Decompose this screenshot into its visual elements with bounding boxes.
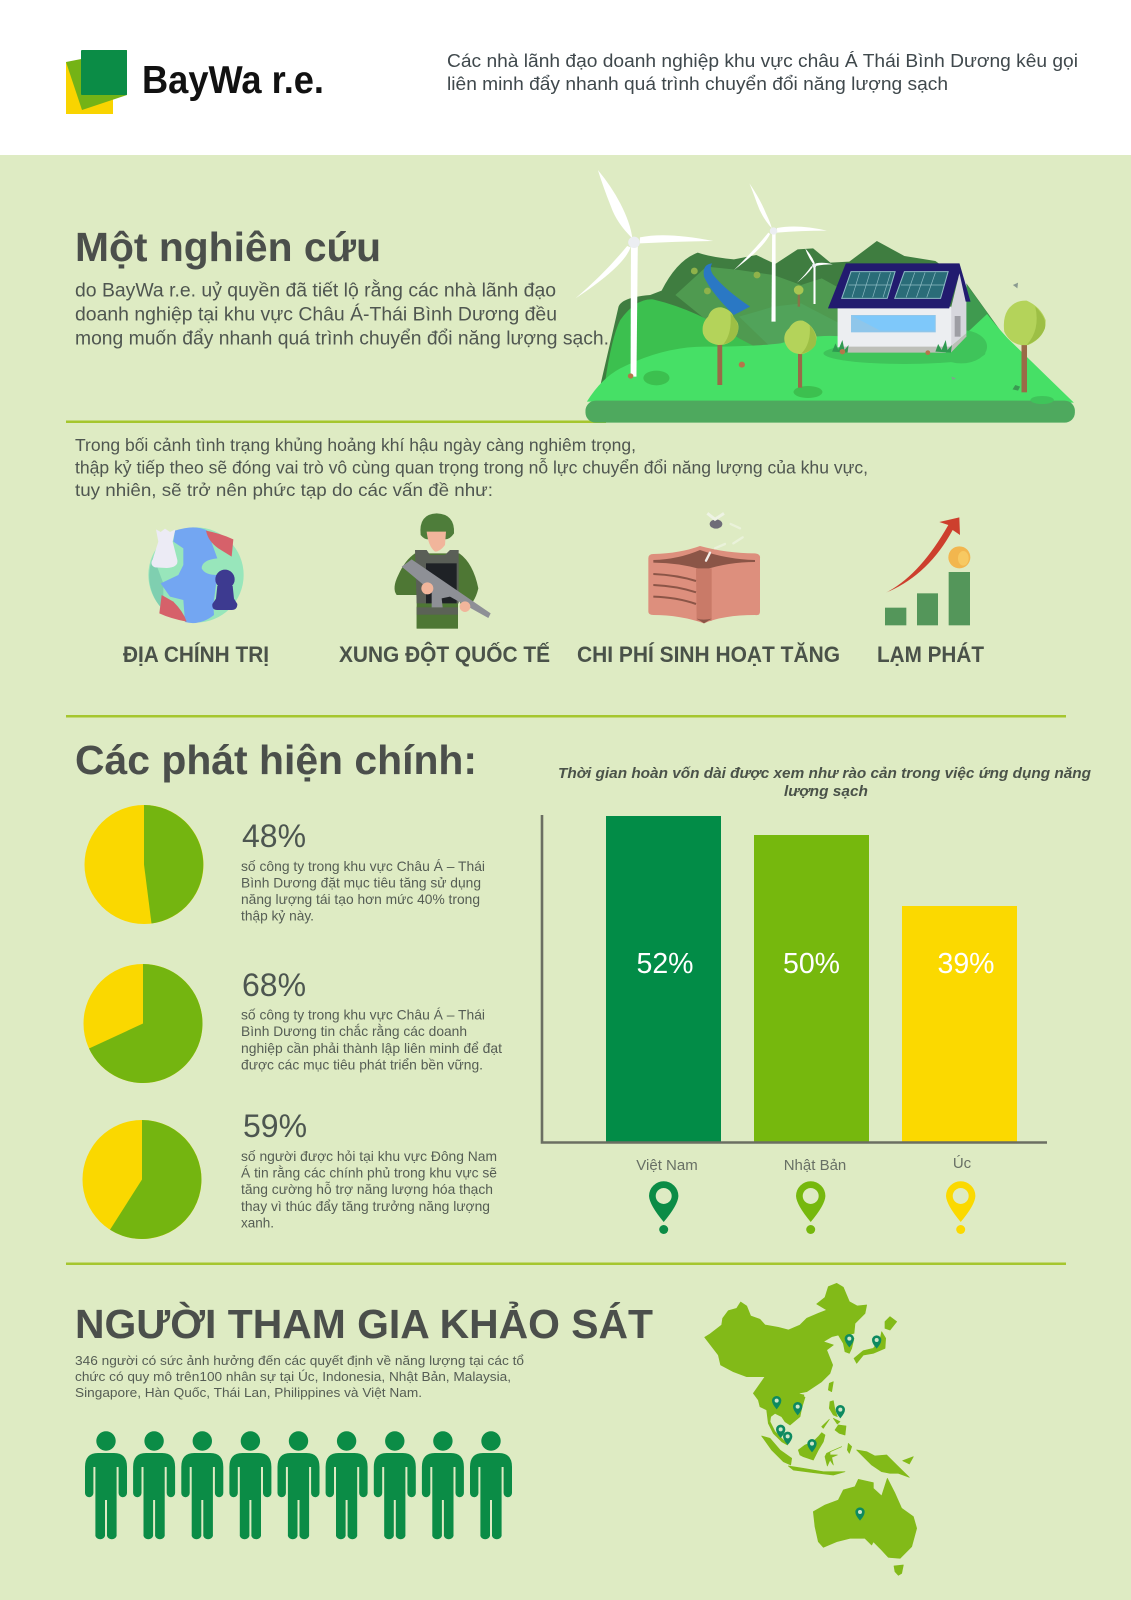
bar labels [636,1155,972,1174]
survey description: 346 người có sức ảnh hưởng đến các quyết định về năng lượng tại các tổ [75,1353,524,1368]
map: Asia-Pacific with survey locations [705,1283,917,1575]
people pictogram row [85,1431,512,1539]
divider [66,715,1066,718]
survey description: Singapore, Hàn Quốc, Thái Lan, Philippines và Việt Nam. [75,1385,422,1400]
finding 2: 68% [242,967,306,1003]
bar chart: 50% [783,948,840,980]
base [585,401,1075,423]
illustration: renewable energy landscape [575,170,1075,423]
pie chart 59% [82,1120,202,1239]
finding 3: xanh. [241,1214,274,1230]
finding 3: Á tin rằng các chính phủ trong khu vực sẽ [241,1164,497,1180]
bar chart: 52% [636,948,694,980]
context text: Trong bối cảnh tình trạng khủng hoảng khí hậu ngày càng nghiêm trọng, [75,435,636,455]
header statement: liên minh đẩy nhanh quá trình chuyển đổi năng lượng sạch [447,74,948,94]
finding 3: thay vì thúc đẩy tăng trưởng năng lượng [241,1198,490,1214]
icon: geopolitics globe [148,527,244,623]
icon: inflation chart [885,517,970,625]
chart title: Thời gian hoàn vốn dài được xem như rào cản trong việc ứng dụng năng [558,765,1091,782]
icon: location pin Nhật Bản [796,1181,825,1234]
labels: issues: XUNG ĐỘT QUỐC TẾ [339,641,550,667]
mound details [643,371,670,385]
heading: survey participants: NGƯỜI THAM GIA KHẢO SÁT [75,1301,653,1347]
heading: Một nghiên cứu: Một nghiên cứu [75,224,381,270]
survey description [75,1353,524,1400]
pie chart 68% [84,964,202,1083]
labels: issues: LẠM PHÁT [877,642,985,667]
bar labels: Việt Nam [636,1157,698,1174]
logo: BayWa r.e. [66,50,324,114]
finding 1: Bình Dương đặt mục tiêu tăng sử dụng [241,874,481,890]
context text [75,435,868,500]
labels: issues: ĐỊA CHÍNH TRỊ [123,642,269,667]
finding 1: thập kỷ này. [241,908,314,924]
chart title: lượng sạch [784,783,868,800]
Australia and Tasmania [813,1478,917,1575]
finding 3: tăng cường hỗ trợ năng lượng hóa thạch [241,1181,493,1197]
river [704,263,750,315]
finding 2: nghiệp cần phải thành lập liên minh để đạt [241,1040,502,1056]
chart title [558,765,1091,800]
finding 2: số công ty trong khu vực Châu Á – Thái [241,1006,485,1022]
intro text: doanh nghiệp tại khu vực Châu Á-Thái Bình Dương đều [75,304,557,326]
Southeast Asian islands and Papua [762,1401,913,1477]
bar chart: 39% [937,948,995,980]
finding 2: Bình Dương tin chắc rằng các doanh [241,1023,467,1039]
finding 2 [84,964,502,1083]
finding 1: 48% [242,818,306,854]
tree 2 [784,320,817,388]
intro text: mong muốn đẩy nhanh quá trình chuyển đổi năng lượng sạch. [75,328,609,350]
bar labels: Úc [953,1155,972,1172]
pie chart 48% [84,805,204,924]
survey description: chức có quy mô trên100 nhân sự tại Úc, Indonesia, Nhật Bản, Malaysia, [75,1369,511,1384]
bar chart [542,815,1047,1142]
small background tree [798,292,800,307]
intro text: do BayWa r.e. uỷ quyền đã tiết lộ rằng các nhà lãnh đạo [75,280,556,302]
finding 2: được các mục tiêu phát triển bền vững. [241,1056,483,1072]
house [828,263,971,353]
intro text [75,280,609,350]
icon: location pin Úc [946,1181,975,1234]
header statement [447,51,1078,94]
finding 1 [84,805,485,924]
labels: issues [123,641,985,667]
finding 1: số công ty trong khu vực Châu Á – Thái [241,858,485,874]
bar labels: Nhật Bản [784,1157,846,1174]
context text: thập kỷ tiếp theo sẽ đóng vai trò vô cùng quan trọng trong nỗ lực chuyển đổi năng lượng của khu vực, [75,456,868,478]
logo: BayWa r.e.: BayWa r.e. [142,59,324,102]
location pins [772,1334,881,1521]
divider [66,1262,1066,1265]
wind turbine 2 [734,183,827,322]
finding 1: năng lượng tái tạo hơn mức 40% trong [241,891,480,907]
wind turbine 1 [575,170,713,377]
header statement: Các nhà lãnh đạo doanh nghiệp khu vực châu Á Thái Bình Dương kêu gọi [447,51,1078,71]
tree 1 [703,307,739,385]
tree 3 [1004,301,1046,392]
heading: Các phát hiện chính: Các phát hiện chính: [75,737,477,783]
icon: location pin Việt Nam [649,1181,678,1234]
ground [587,314,1074,403]
finding 3: số người được hỏi tại khu vực Đông Nam [241,1148,497,1164]
icon: cost of living wallet [648,513,760,623]
context text: tuy nhiên, sẽ trở nên phức tạp do các vấn đề như: [75,480,493,500]
finding 3: 59% [243,1108,307,1144]
labels: issues: CHI PHÍ SINH HOẠT TĂNG [577,642,840,667]
finding 3 [82,1108,497,1239]
wind turbine 3 [797,248,833,304]
mainland Asia, Japan, Taiwan, Hainan [705,1283,897,1445]
icon: soldier [395,513,491,629]
divider [66,420,606,423]
